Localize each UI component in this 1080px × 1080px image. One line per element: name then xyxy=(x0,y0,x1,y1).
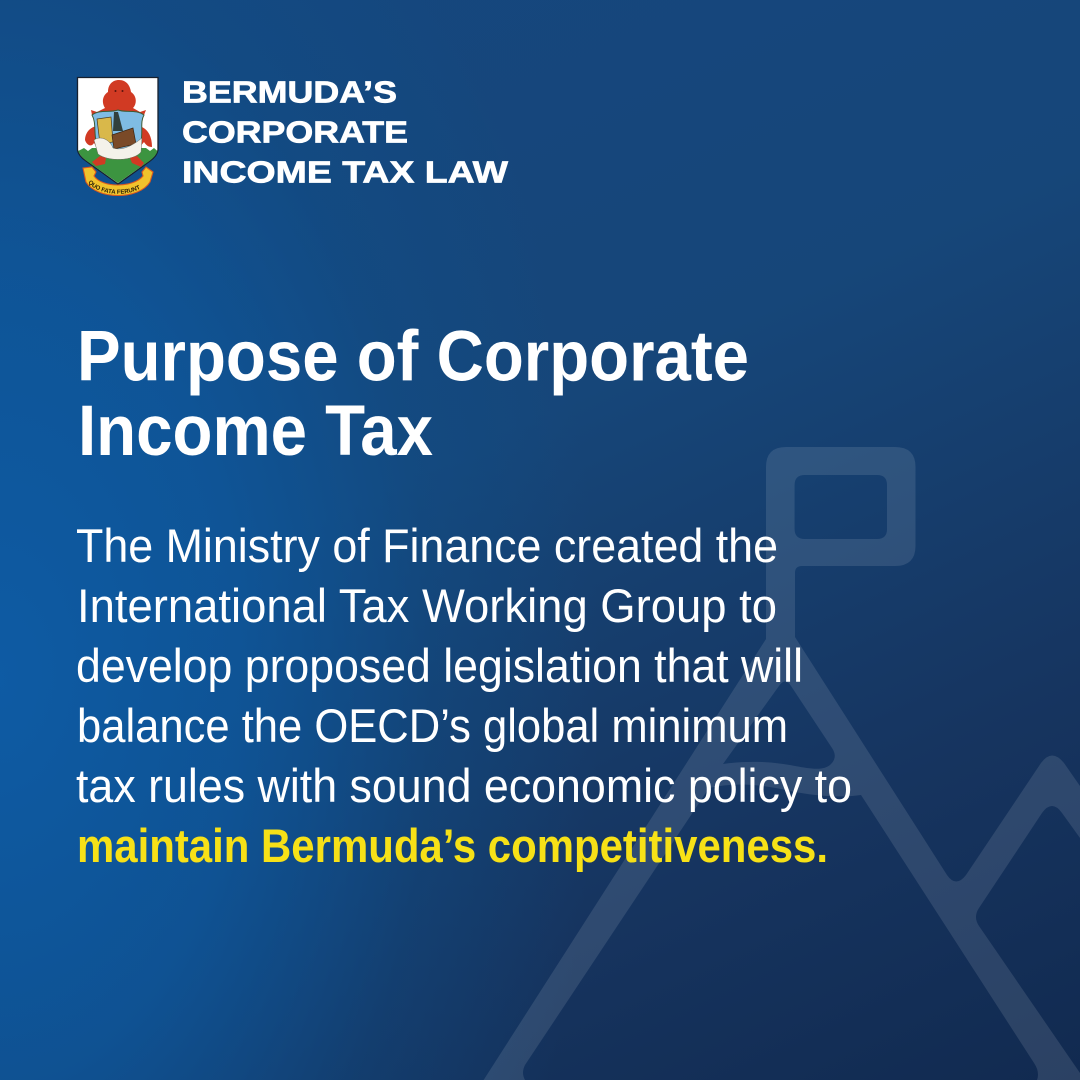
heading: Bermuda's Corporate Income Tax Law: BERMUDA’S xyxy=(182,74,397,109)
crest mast xyxy=(113,112,123,131)
crest right supporter xyxy=(139,126,152,148)
crest motto: QUO FATA FERUNT xyxy=(88,180,140,194)
icon: Bermuda coat of arms xyxy=(76,76,159,196)
heading: Bermuda's Corporate Income Tax Law: INCOME TAX LAW xyxy=(182,154,509,189)
crest ship xyxy=(112,128,136,149)
crest right foot xyxy=(130,156,144,167)
body text xyxy=(76,519,852,812)
body text: International Tax Working Group to xyxy=(77,579,777,632)
body text: The Ministry of Finance created the xyxy=(76,519,778,572)
crest shield xyxy=(78,78,158,184)
crest lion top xyxy=(91,80,146,115)
crest banner xyxy=(83,167,153,196)
body text: tax rules with sound economic policy to xyxy=(76,759,852,812)
body text: balance the OECD’s global minimum xyxy=(77,699,788,752)
title: Purpose of Corporate Income Tax: Purpose of Corporate xyxy=(77,318,749,396)
heading: Bermuda's Corporate Income Tax Law xyxy=(182,74,509,189)
title: Purpose of Corporate Income Tax: Income Tax xyxy=(78,392,433,471)
crest inner shield xyxy=(92,110,144,157)
crest left foot xyxy=(92,156,106,166)
crest white waves xyxy=(94,138,142,159)
icon: watermark flag on mountains xyxy=(484,447,1080,1080)
crest yellow rock xyxy=(97,117,113,144)
body text: develop proposed legislation that will xyxy=(76,639,803,692)
highlighted conclusion: maintain Bermuda’s competitiveness. xyxy=(77,819,828,872)
heading: Bermuda's Corporate Income Tax Law: CORPORATE xyxy=(182,114,408,149)
crest left supporter xyxy=(85,126,97,148)
crest green ground xyxy=(78,148,157,183)
title: Purpose of Corporate Income Tax xyxy=(77,318,749,471)
